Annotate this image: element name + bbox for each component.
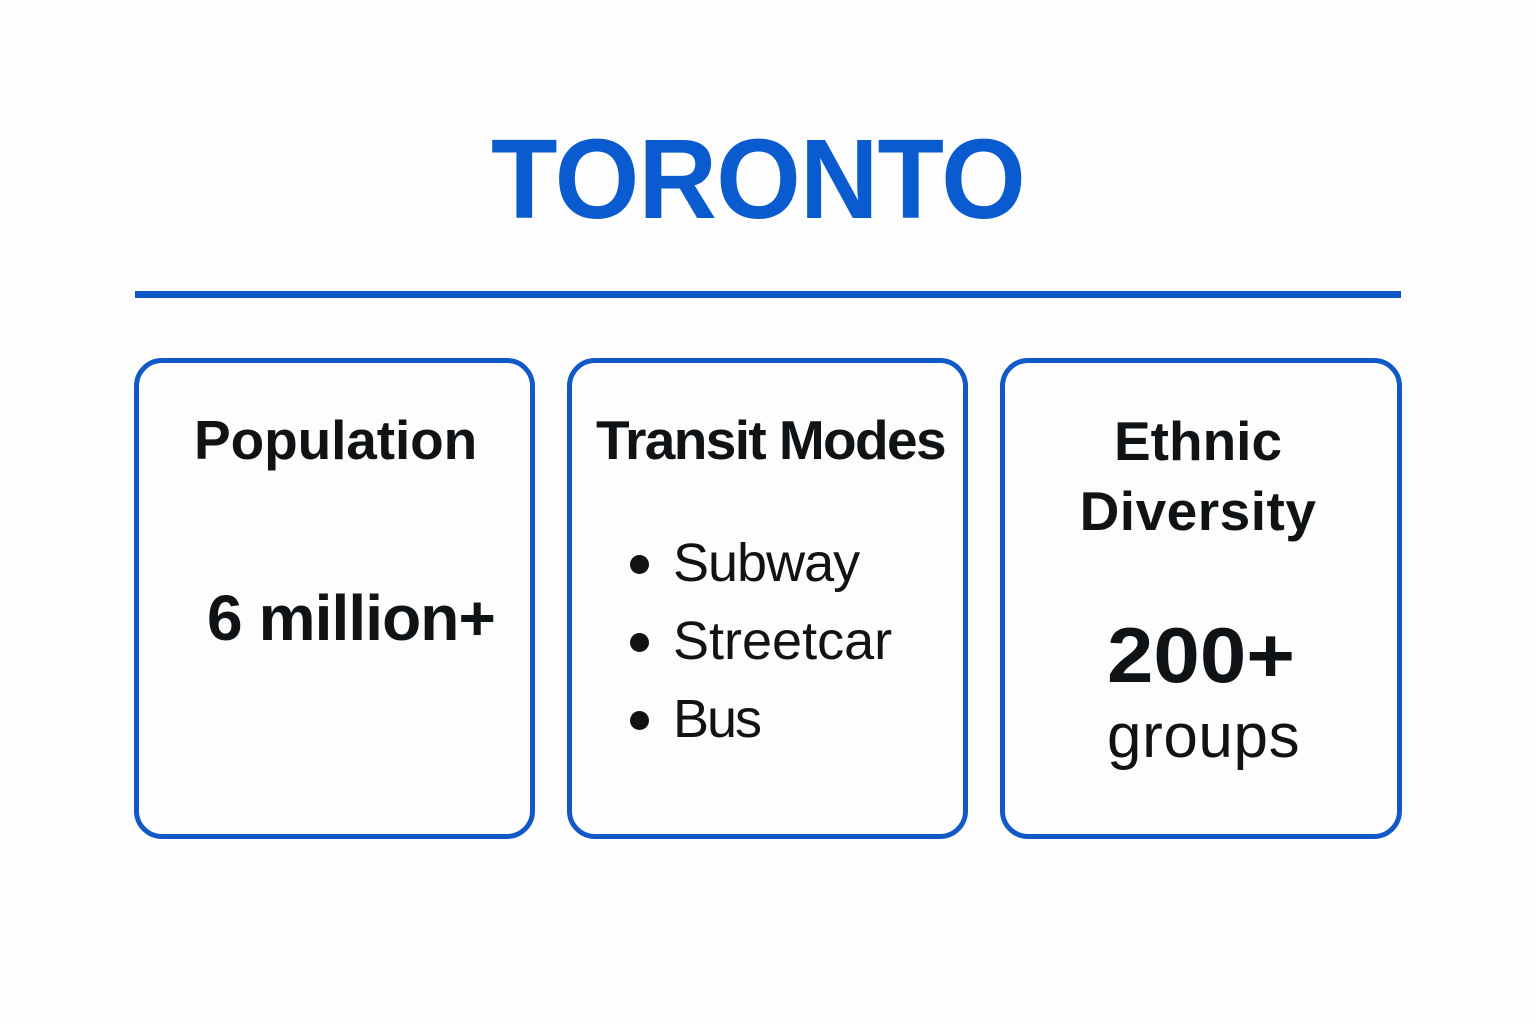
list item: bus [630, 689, 760, 749]
heading: population: Population [194, 409, 477, 471]
list item: subway: Subway [673, 533, 859, 593]
stat: 200+: 200+ [1107, 611, 1295, 699]
stat label: groups: groups [1107, 702, 1300, 771]
list item: streetcar: Streetcar [673, 611, 892, 671]
list: transit modes [630, 533, 892, 749]
heading: transit modes: Transit Modes [596, 409, 945, 471]
header rule [135, 291, 1401, 298]
panel: transit modes [567, 358, 968, 839]
title: TORONTO [491, 116, 1025, 242]
heading: ethnic diversity: Diversity [1080, 480, 1316, 542]
panel: ethnic diversity [1000, 358, 1402, 839]
list item: bus: Bus [673, 689, 760, 749]
heading: ethnic diversity: Ethnic [1114, 410, 1282, 472]
heading: ethnic diversity [1080, 410, 1316, 542]
stat: 6 million+: 6 million+ [207, 582, 495, 654]
panel: population [134, 358, 535, 839]
